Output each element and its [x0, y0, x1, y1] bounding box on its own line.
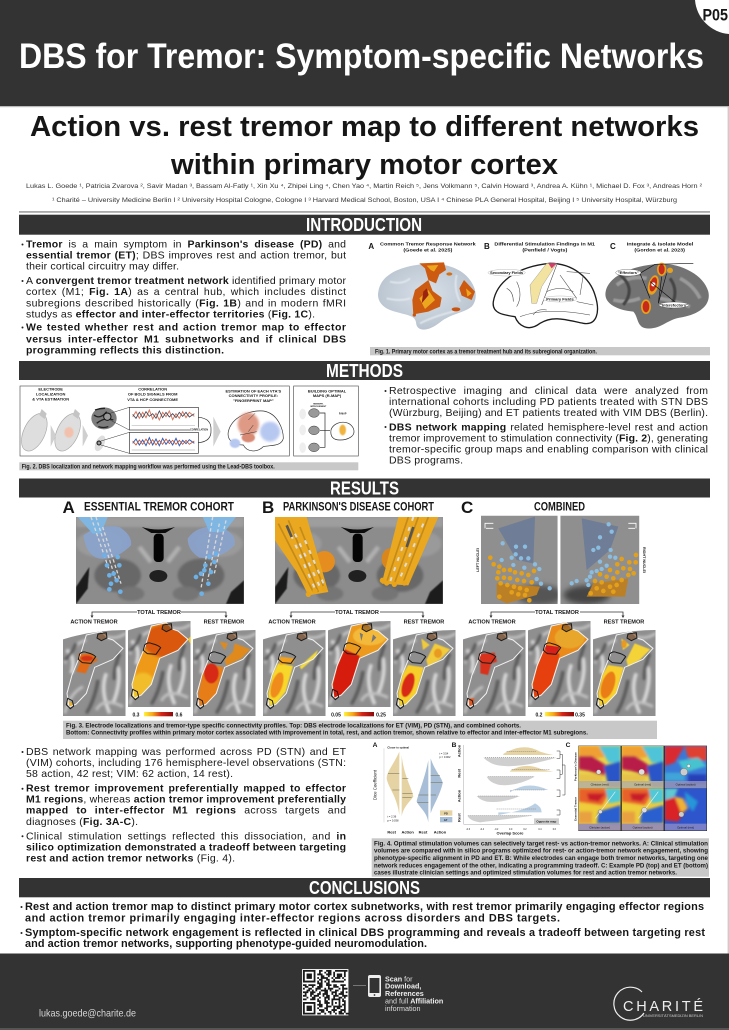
- panel labels and titles: Common Tremor Response Network: [380, 241, 476, 247]
- text block: results: [22, 746, 347, 864]
- text block: introduction: We tested whether rest and action tremor map to effector: [26, 322, 346, 334]
- brain C: integrate and isolate model: [605, 263, 709, 329]
- step: electrode localization: ELECTRODE: [38, 387, 63, 392]
- chart B: overlap score raincloud: 0.4: [538, 829, 542, 831]
- colour bar: combined: [536, 712, 585, 718]
- section bar: introduction: INTRODUCTION: [306, 215, 422, 235]
- chart B: overlap score raincloud: Opposite map: [536, 819, 556, 823]
- step: electrode localization: LOCALIZATION: [36, 392, 65, 397]
- step: fingerprint map: "FINGERPRINT MAP": [233, 398, 274, 403]
- heatmap: PD clinician: Clinician (rest): [591, 782, 609, 786]
- figure 1 caption: [370, 347, 710, 355]
- logo: Charité: CHARITÉ: [623, 998, 703, 1015]
- chart A: dice coefficient violins: p = 0.038: [387, 818, 399, 822]
- panel C: combined cohort: COMBINED: [534, 500, 585, 514]
- cortex map: combined action: [463, 630, 526, 716]
- brain B: differential stimulation line drawing: [488, 263, 597, 328]
- heatmap: ET optimal action: Optimal (action): [633, 825, 653, 829]
- step: electrode localization: [16, 387, 221, 455]
- text block: conclusions: and action tremor networks, supporting phenotype-guided neuromodulation.: [25, 938, 427, 950]
- cortex map: PD total: [328, 621, 391, 707]
- panel A: essential tremor cohort: [62, 498, 244, 604]
- text block: results: silico optimization demonstrated a tradeoff between targeting: [26, 842, 346, 854]
- panel B: Parkinson's disease cohort: [262, 498, 443, 604]
- text block: methods: Retrospective imaging and clinical data were analyzed from: [389, 385, 708, 397]
- chart A: dice coefficient violins: t = 3.54: [439, 751, 449, 755]
- text block: methods: DBS programs.: [389, 455, 463, 467]
- figure 1 caption: Fig. 1. Primary motor cortex as a tremor treatment hub and its subregional organization.: [375, 348, 597, 355]
- tremor brackets and labels: REST TREMOR: [404, 620, 444, 626]
- tremor brackets and labels: TOTAL TREMOR: [335, 610, 379, 616]
- text block: results: 58 action, 42 rest; VIM: 62 action, 14 rest).: [26, 768, 233, 780]
- main heading: within primary motor cortex: [170, 149, 558, 181]
- figure 4 caption: volumes are compared with in silico programs optimized for rest- or action-tremor network engagement, showing: [374, 848, 708, 855]
- section bar: results: RESULTS: [330, 478, 399, 498]
- tremor brackets and labels: ACTION TREMOR: [70, 620, 118, 626]
- section bar: results: [19, 478, 710, 498]
- figure 3 caption: Bottom: Connectivity profiles within primary motor cortex associated with improvement in total, rest, and action tremor, shown relative to effector and inter-effector M1 subregions.: [66, 730, 588, 737]
- text block: introduction: essential tremor (ET); DBS improves rest and action tremor, but: [26, 249, 346, 261]
- QR instruction text: [385, 975, 443, 1013]
- logo: Charité: UNIVERSITÄTSMEDIZIN BERLIN: [643, 1014, 703, 1018]
- text block: methods: international cohorts including PD patients treated with STN DBS: [389, 396, 708, 408]
- chart A: dice coefficient violins: Action: [401, 830, 414, 835]
- text block: introduction: programming reflects this distinction.: [26, 345, 224, 357]
- chart B: overlap score raincloud: Action: [457, 789, 462, 802]
- text block: introduction: Tremor is a main symptom in Parkinson's disease (PD) and: [26, 238, 346, 250]
- chart B: overlap score raincloud: Action: [457, 744, 462, 757]
- text block: methods: (Würzburg, Beijing) and ET patients treated with VIM DBS (Berlin).: [389, 407, 708, 419]
- section bar: methods: METHODS: [326, 361, 403, 381]
- tremor brackets and labels: ACTION TREMOR: [268, 620, 316, 626]
- chart C: stimulation heatmaps: [566, 742, 707, 831]
- tremor brackets and labels: REST TREMOR: [604, 620, 644, 626]
- brain A: tremor response network: [378, 262, 476, 330]
- cortex map: PD rest: [393, 630, 456, 716]
- cortex map: combined rest: [593, 630, 656, 716]
- heatmap: PD optimal action: Optimal (action): [676, 782, 696, 786]
- step: correlation of BOLD signals: [91, 387, 211, 453]
- heatmap: ET optimal rest: Optimal (rest): [677, 825, 694, 829]
- chart B: overlap score raincloud: -0.2: [494, 829, 499, 831]
- step: correlation of BOLD signals: CORRELATION: [190, 429, 208, 432]
- figure 3 caption: [63, 721, 657, 739]
- panel B: Parkinson's disease cohort: PARKINSON'S DISEASE COHORT: [283, 500, 435, 514]
- figure 1 panel: [368, 241, 710, 355]
- workflow box: [16, 386, 289, 456]
- section bar: methods: [19, 361, 710, 381]
- tremor brackets and labels: [70, 610, 644, 626]
- text block: introduction: A convergent tremor treatment network identified primary motor: [26, 275, 346, 287]
- tremor brackets and labels: REST TREMOR: [204, 620, 244, 626]
- figure 2 workflow panel: [16, 386, 358, 470]
- step: electrode localization: & VTA ESTIMATION: [32, 397, 69, 402]
- chart A: dice coefficient violins: Action: [434, 830, 447, 835]
- text block: results: rest and action tremor networks (Fig. 4).: [26, 852, 235, 864]
- cortex map: ET total: [128, 621, 191, 707]
- cortex map: ET action: [63, 630, 126, 716]
- colour bar: combined: 0.35: [575, 712, 585, 718]
- text block: results: Rest tremor improvement preferentially mapped to effector: [26, 783, 346, 795]
- authors: Lukas L. Goede ¹, Patricia Zvarova ², Savir Madan ³, Bassam Al-Fatly ¹, Xin Xu ⁴, Zhipei Ling ⁴, Chen Yao ⁴, Martin Reich ⁵, Jens Volkmann ⁵, Calvin Howard ³, Andrea A. Kühn ¹, Michael D. Fox ³, Andreas Horn ²: [26, 183, 702, 190]
- section bar: conclusions: [19, 878, 710, 898]
- callout: secondary fields: Secondary Fields: [490, 270, 524, 275]
- chart A: dice coefficient violins: t = 2.36: [387, 815, 397, 819]
- step: fingerprint map: [225, 388, 283, 451]
- QR instruction text: and full Affiliation: [385, 996, 443, 1005]
- text block: introduction: versus inter-effector M1 subnetworks and if clinical DBS: [26, 333, 346, 345]
- text block: introduction: cortex (M1; Fig. 1A) as a central hub, which includes distinct: [26, 286, 346, 298]
- badge: poster number: [695, 0, 729, 34]
- heatmap: PD optimal action: [665, 746, 707, 788]
- text block: methods: tremor improvement to stimulation connectivity (Fig. 2), generating: [389, 432, 708, 444]
- text block: results: M1 regions, whereas action tremor improvement preferentially: [26, 794, 346, 806]
- label: right nuclei: RIGHT NUCLEI: [642, 547, 646, 573]
- figure 3 caption: Fig. 3. Electrode localizations and tremor-type specific connectivity profiles. Top: DBS electrode localizations for ET (VIM), PD (STN), and combined cohorts.: [66, 722, 521, 729]
- figure 4 caption: [372, 838, 709, 877]
- chart B: overlap score raincloud: B: [452, 742, 457, 749]
- heatmap: ET clinician: [579, 788, 621, 831]
- chart B: overlap score raincloud: Rest: [457, 768, 462, 778]
- chart B: overlap score raincloud: Overlap Score: [496, 831, 524, 836]
- footer band: [0, 954, 729, 1030]
- colour bar: Parkinson's disease: [331, 712, 386, 718]
- chart B: overlap score raincloud: -0.4: [480, 829, 485, 831]
- step: building optimal maps: MAPS (R-MAP): [313, 393, 342, 398]
- contact email: lukas.goede@charite.de: [39, 1008, 136, 1020]
- QR instruction text: Scan for: [385, 975, 413, 984]
- text block: conclusions: Symptom-specific network engagement is reflected in clinical DBS programming and reveals a tradeoff between targeting rest: [25, 927, 705, 939]
- colour bar: essential tremor: 0.3: [133, 712, 140, 718]
- text block: methods: DBS network mapping related hemisphere-level rest and action: [389, 421, 708, 433]
- panel A: essential tremor cohort: ESSENTIAL TREMOR COHORT: [84, 500, 235, 514]
- electrode image: Parkinson's disease: [275, 517, 443, 604]
- panel C: combined cohort: C: [461, 498, 473, 517]
- QR code: [302, 969, 349, 1015]
- chart A: dice coefficient violins: [373, 742, 452, 835]
- text block: results: Clinical stimulation settings reflected this dissociation, and in: [26, 830, 346, 842]
- QR instruction text: References: [385, 989, 424, 998]
- tremor brackets and labels: TOTAL TREMOR: [535, 610, 579, 616]
- header banner: [0, 0, 729, 107]
- heatmap: ET clinician: Clinician (action): [589, 825, 610, 829]
- section bar: introduction: [19, 215, 710, 235]
- QR instruction text: Download,: [385, 982, 421, 991]
- text block: conclusions: Rest and action tremor map to distinct primary motor cortex subnetworks, with rest tremor primarily engaging effector regions: [25, 901, 704, 913]
- step: fingerprint map: ESTIMATION OF EACH VTA'S: [225, 388, 282, 393]
- panel labels and titles: Differential Stimulation Findings in M1: [494, 241, 595, 247]
- panel C: combined cohort: [461, 498, 646, 605]
- panel labels and titles: Integrate & Isolate Model: [627, 241, 693, 247]
- panel A: essential tremor cohort: A: [62, 498, 75, 517]
- text block: methods: [384, 385, 708, 467]
- panel labels and titles: (Goede et al. 2025): [403, 248, 453, 254]
- step: building optimal maps: [294, 386, 358, 456]
- text block: results: (VIM) cohorts, including 176 hemisphere-level observations (STN:: [26, 757, 346, 769]
- label: left nuclei: LEFT NUCLEI: [476, 548, 480, 572]
- cortex map: ET rest: [193, 630, 256, 716]
- text block: introduction: subregions described historically (Fig. 1B) and in modern fMRI: [26, 297, 346, 309]
- text block: results: diagnoses (Fig. 3A-C).: [26, 816, 138, 828]
- heatmap: PD optimal rest: [622, 746, 664, 788]
- icon: smartphone: [368, 975, 381, 997]
- chart C: stimulation heatmaps: C: [566, 742, 571, 749]
- logo: Charité: [614, 987, 703, 1020]
- step: building optimal maps: R-MAP: [339, 412, 347, 415]
- figure 4 caption: Fig. 4. Optimal stimulation volumes can selectively target rest- vs action-tremor networks. A: Clinical stimulation: [374, 840, 708, 848]
- chart B: overlap score raincloud: -0.6: [466, 829, 471, 831]
- main heading: [30, 111, 699, 181]
- chart A: dice coefficient violins: Rest: [419, 830, 428, 835]
- figure 4 panel: [372, 742, 709, 877]
- nuclei view: left: [481, 516, 563, 605]
- chart B: overlap score raincloud: [452, 742, 565, 836]
- chart C: stimulation heatmaps: Parkinson's Disease: [574, 752, 578, 781]
- QR instruction text: information: [385, 1004, 421, 1013]
- colour bar: essential tremor: 0.6: [176, 712, 183, 718]
- callout: primary fields: Primary Fields: [546, 296, 575, 301]
- chart B: overlap score raincloud: 0.0: [509, 829, 513, 831]
- chart A: dice coefficient violins: Dice Coefficient: [373, 769, 378, 800]
- main heading: Action vs. rest tremor map to different networks: [30, 111, 699, 143]
- chart A: dice coefficient violins: PD: [444, 811, 448, 815]
- heatmap: PD optimal rest: Optimal (rest): [634, 782, 651, 786]
- tremor brackets and labels: TOTAL TREMOR: [137, 610, 181, 616]
- chart A: dice coefficient violins: Rest: [387, 830, 397, 835]
- panel labels and titles: C: [610, 242, 616, 251]
- text block: results: mapped to inter-effector M1 regions across targets and: [26, 805, 346, 817]
- colour bar: combined: 0.2: [536, 712, 543, 718]
- colour bar: Parkinson's disease: 0.05: [331, 712, 341, 718]
- step: correlation of BOLD signals: OF BOLD SIGNALS FROM: [128, 392, 178, 397]
- step: correlation of BOLD signals: VTA & HCP CONNECTOME: [127, 397, 178, 402]
- chart B: overlap score raincloud: 0.6: [553, 829, 557, 831]
- chart A: dice coefficient violins: Closer to optimal: [387, 745, 409, 749]
- figure 4 caption: cases illustrate clinician settings and optimized stimulation volumes for rest and action tremor networks.: [374, 869, 677, 876]
- chart A: dice coefficient violins: p = 0.002: [439, 755, 451, 759]
- text block: conclusions: [20, 901, 705, 950]
- step: building optimal maps: IMPROVEMENT: [310, 406, 327, 408]
- step: building optimal maps: HEMISPH.: [313, 403, 324, 405]
- section bar: conclusions: CONCLUSIONS: [309, 878, 420, 898]
- panel labels and titles: B: [484, 242, 490, 251]
- chart A: dice coefficient violins: A: [373, 742, 378, 749]
- text block: introduction: [22, 238, 346, 357]
- heatmap: ET optimal rest: [665, 788, 707, 831]
- panel labels and titles: (Penfield / Vogts): [522, 248, 568, 254]
- panel labels and titles: (Gordon et al. 2023): [634, 248, 685, 254]
- chart C: stimulation heatmaps: Essential Tremor: [574, 796, 578, 821]
- text block: conclusions: and action tremor primarily engaging inter-effector regions across disorders and DBS targets.: [25, 912, 560, 924]
- chart B: overlap score raincloud: Rest: [457, 813, 462, 822]
- text block: introduction: studys as effector and inter-effector territories (Fig. 1C).: [26, 308, 315, 320]
- callout: inter-effectors: "Interefectors": [660, 302, 688, 307]
- heatmap: ET optimal action: [622, 788, 664, 831]
- callout: effectors: "Effectors": [618, 270, 639, 275]
- step: building optimal maps: BUILDING OPTIMAL: [308, 388, 347, 393]
- figure 4 caption: phenotype-specific alignment in PD and ET. B: While electrodes can engage both tremor networks, targeting one: [374, 855, 708, 862]
- panel B: Parkinson's disease cohort: B: [262, 498, 274, 517]
- electrode image: essential tremor: [76, 517, 244, 604]
- chart B: overlap score raincloud: 0.2: [523, 829, 527, 831]
- text block: introduction: their cortical circuitry may differ.: [26, 261, 179, 273]
- cortex map: combined total: [528, 621, 591, 707]
- figure 2 caption: Fig. 2. DBS localization and network mapping workflow was performed using the Lead-DBS toolbox.: [22, 464, 275, 470]
- colour bar: essential tremor: [133, 712, 183, 718]
- panel labels and titles: [368, 241, 693, 254]
- text block: results: DBS network mapping was performed across PD (STN) and ET: [26, 746, 347, 758]
- panel labels and titles: A: [368, 242, 374, 251]
- heatmap: PD clinician: [579, 746, 621, 788]
- step: fingerprint map: CONNECTIVITY PROFILE:: [229, 393, 278, 398]
- colour bar: Parkinson's disease: 0.25: [376, 712, 386, 718]
- tremor brackets and labels: ACTION TREMOR: [468, 620, 516, 626]
- chart A: dice coefficient violins: ET: [444, 818, 448, 822]
- step: correlation of BOLD signals: CORRELATION: [138, 387, 167, 392]
- affiliations: ¹ Charité – University Medicine Berlin I ² University Hospital Cologne, Cologne I ³ Harvard Medical School, Boston, USA I ⁴ Chinese PLA General Hospital, Beijing I ⁵ University Hospital, Würzburg: [52, 197, 677, 204]
- figure 4 caption: network reduces engagement of the other, indicating a programming tradeoff. C: Example PD (top) and ET (bottom): [374, 862, 708, 869]
- nuclei view: right: [560, 516, 639, 604]
- text block: methods: tremor-specific group maps and enabling comparison with clinical: [389, 444, 708, 456]
- cortex map: PD action: [263, 630, 326, 716]
